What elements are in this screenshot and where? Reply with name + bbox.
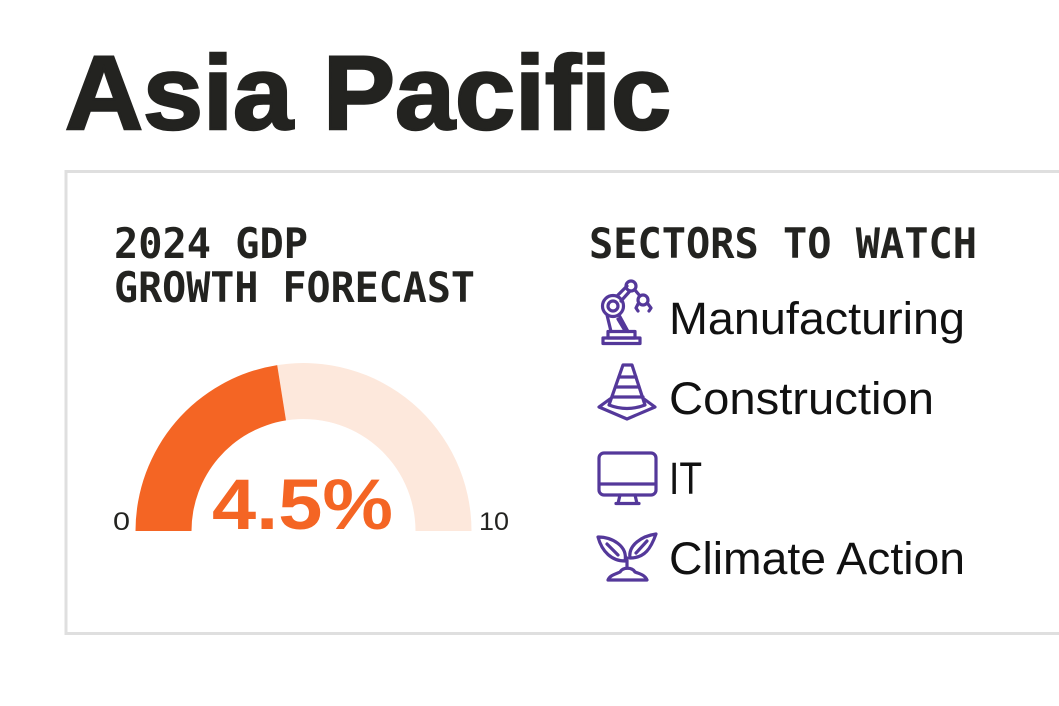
icon: traffic cone (599, 365, 655, 419)
title: Asia Pacific (65, 35, 671, 152)
heading: GDP forecast (114, 219, 475, 312)
icon: monitor (599, 453, 656, 504)
label: Construction: Construction (669, 373, 934, 424)
gauge minimum: 0 (113, 508, 130, 536)
gauge chart (113, 363, 509, 545)
heading: sectors to watch: SECTORS TO WATCH (589, 219, 977, 268)
heading: GDP forecast: GROWTH FORECAST (114, 263, 475, 312)
gauge value label: 4.5% (212, 466, 393, 545)
heading: GDP forecast: 2024 GDP (114, 219, 308, 268)
panel: outline (66, 172, 1059, 634)
icon: robot arm (602, 281, 651, 344)
gauge value (136, 365, 286, 531)
label: Climate Action: Climate Action (669, 533, 965, 584)
gauge maximum: 10 (479, 508, 509, 536)
gauge remainder (277, 363, 472, 531)
label: IT: IT (669, 453, 702, 504)
label: Manufacturing: Manufacturing (669, 293, 965, 344)
icon: plant (598, 534, 656, 580)
